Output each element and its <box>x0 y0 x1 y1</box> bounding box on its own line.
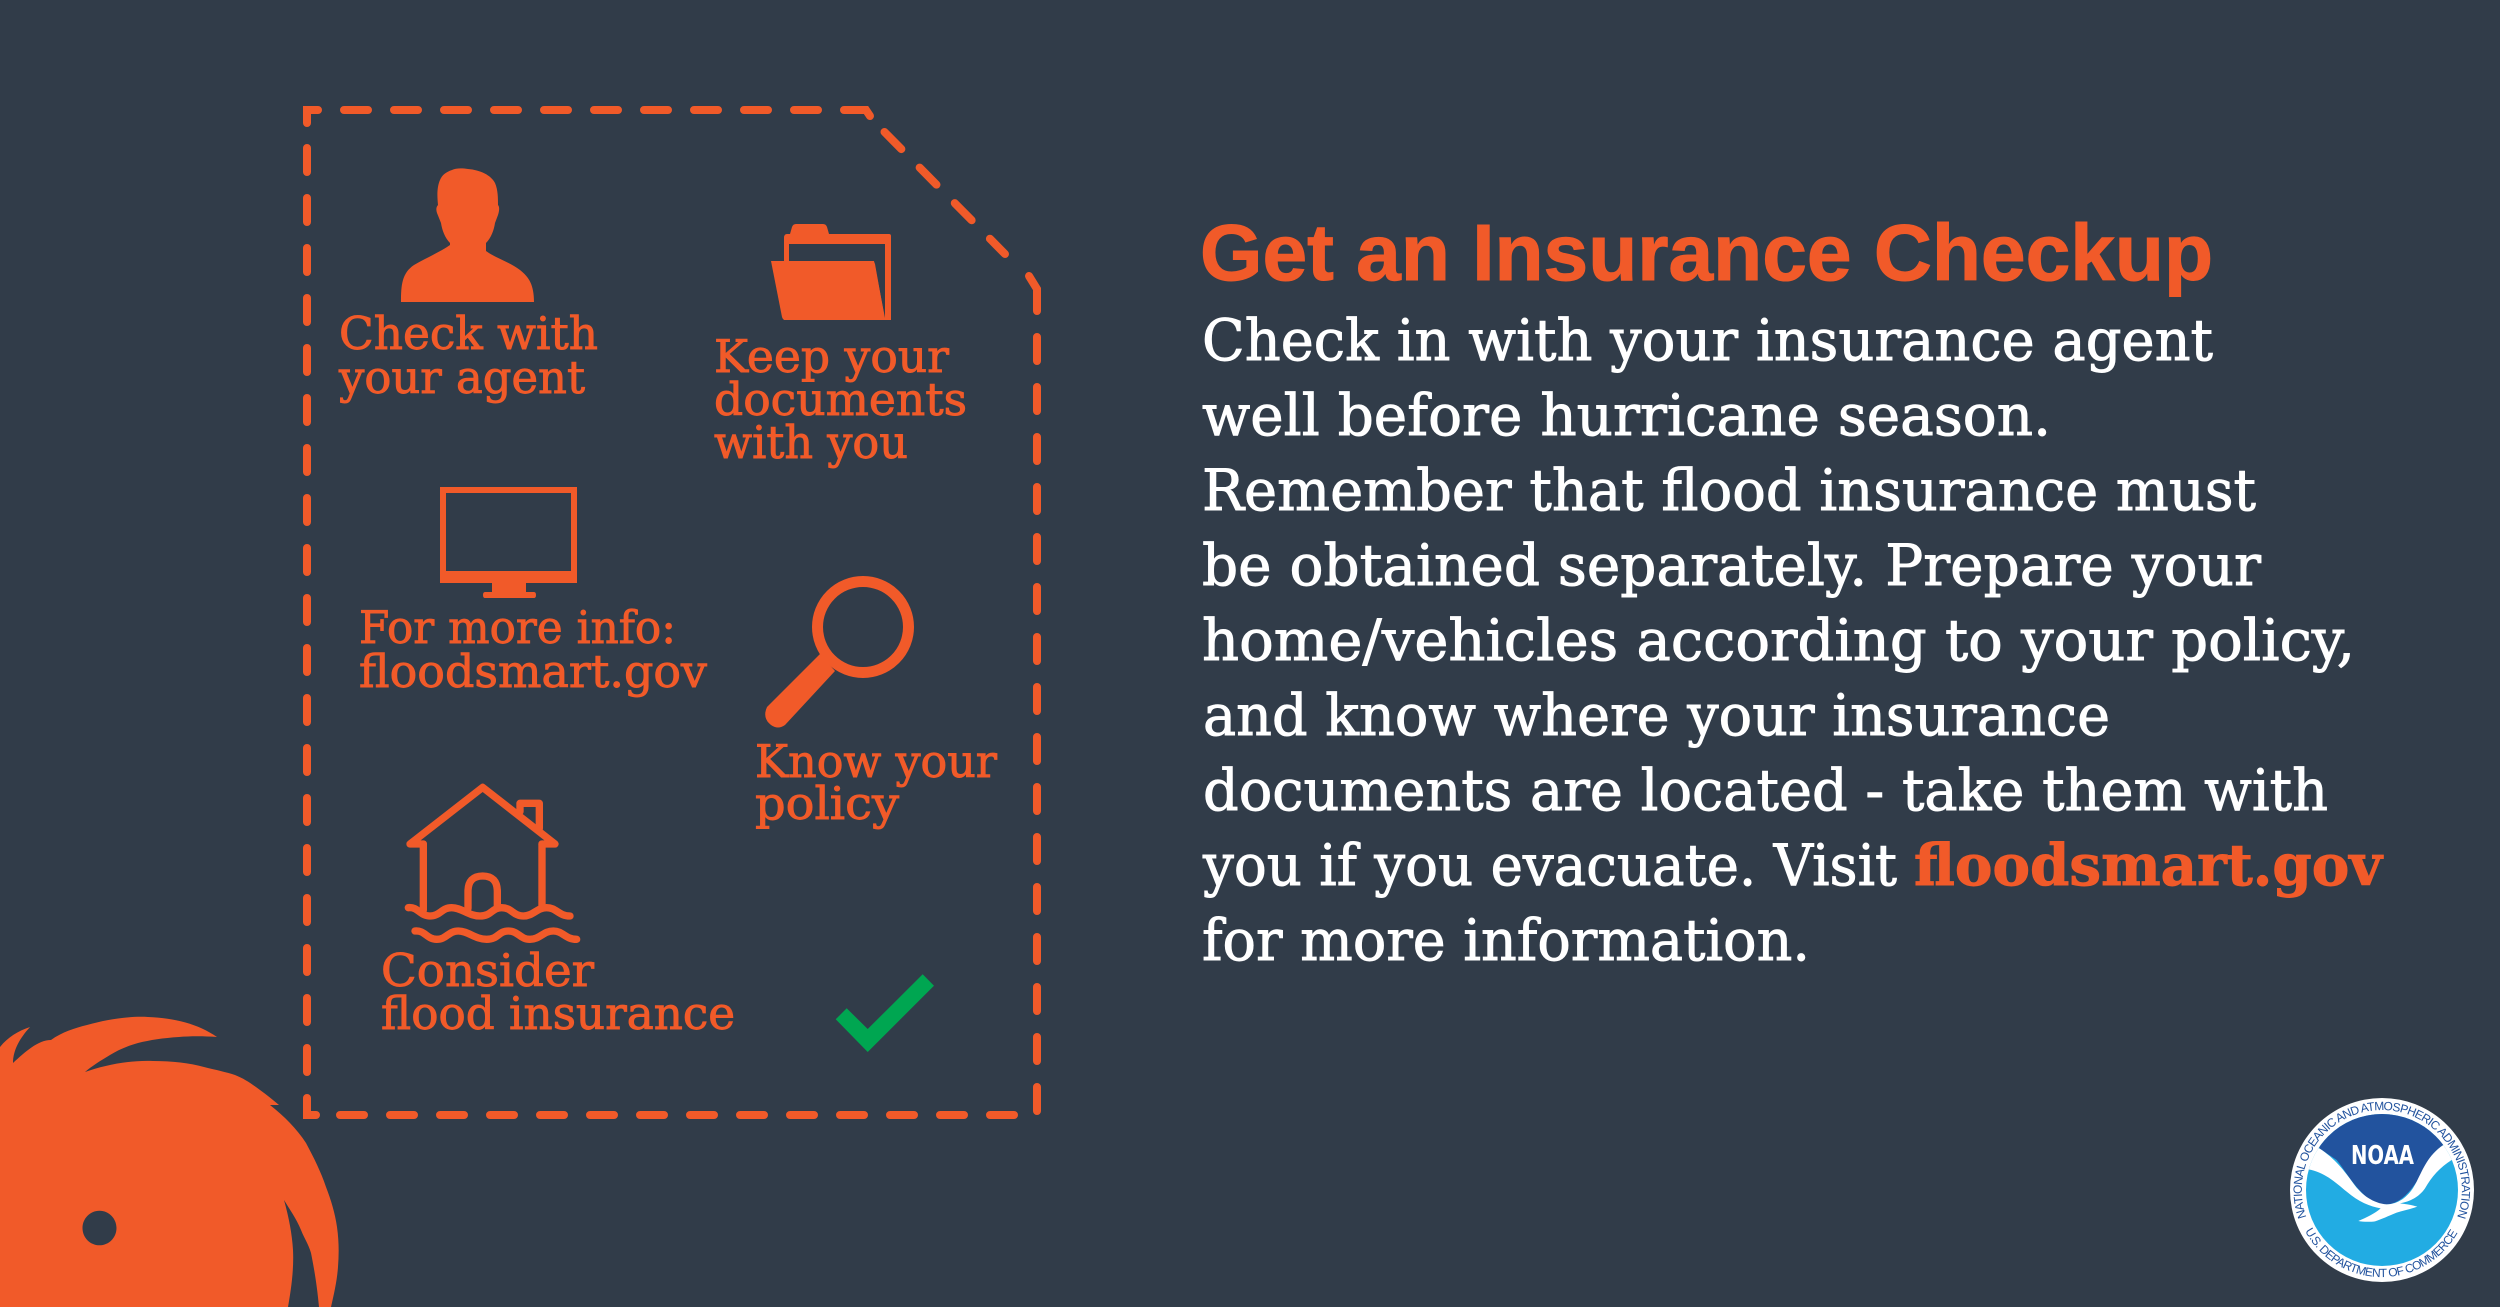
text block: body copy: floodsmart.gov <box>1914 832 2384 899</box>
text block: body copy: be obtained separately. Prepare your <box>1202 533 2262 599</box>
label: for more info floodsmart.gov: floodsmart.gov <box>359 645 708 698</box>
label: check with your agent <box>338 307 598 404</box>
label: for more info floodsmart.gov <box>359 601 708 698</box>
label: keep your documents with you <box>714 330 967 469</box>
label: consider flood insurance: flood insurance <box>381 987 735 1040</box>
label: check with your agent: your agent <box>338 351 585 404</box>
panel: document checklist <box>307 110 1037 1115</box>
heading: Get an Insurance Checkup <box>1200 208 2213 297</box>
label: know your policy: policy <box>755 777 900 830</box>
icon: computer monitor <box>440 487 577 598</box>
icon: magnifying glass <box>765 582 908 728</box>
text block: body copy: Check in with your insurance agent <box>1202 308 2213 374</box>
icon: person <box>401 168 534 302</box>
text block: body copy: documents are located - take them with <box>1203 758 2328 824</box>
label: for more info floodsmart.gov: For more info: <box>359 601 676 654</box>
icon: flooded house <box>408 787 577 939</box>
label: know your policy <box>755 735 997 830</box>
text block: body copy: and know where your insurance <box>1203 683 2110 749</box>
text block: body copy: for more information. <box>1202 908 1810 974</box>
icon: green check mark <box>836 974 934 1052</box>
icon: NOAA logo <box>2290 1098 2474 1282</box>
logo ring text: NATIONAL OCEANIC AND ATMOSPHERIC ADMINISTRATION <box>2293 1102 2470 1219</box>
icon: folder <box>771 224 891 320</box>
label: keep your documents with you: with you <box>714 416 908 469</box>
label: consider flood insurance <box>381 944 735 1040</box>
logo ring text <box>2293 1102 2470 1278</box>
label: know your policy: Know your <box>755 735 997 788</box>
label: keep your documents with you: documents <box>714 373 967 426</box>
logo wordmark: NOAA <box>2351 1141 2414 1171</box>
label: keep your documents with you: Keep your <box>714 330 949 383</box>
logo ring text: U.S. DEPARTMENT OF COMMERCE <box>2306 1228 2458 1278</box>
text block: body copy <box>1202 308 2384 974</box>
label: consider flood insurance: Consider <box>381 944 594 997</box>
text block: body copy: you if you evacuate. Visit <box>1202 833 1897 899</box>
dashed document outline <box>307 110 1037 1115</box>
text block: body copy: well before hurricane season. <box>1202 383 2051 449</box>
text block: body copy: Remember that flood insurance must <box>1202 458 2256 524</box>
text block: body copy: home/vehicles according to your policy, <box>1202 608 2355 674</box>
label: check with your agent: Check with <box>339 307 598 360</box>
icon: hurricane symbol <box>0 1017 339 1307</box>
